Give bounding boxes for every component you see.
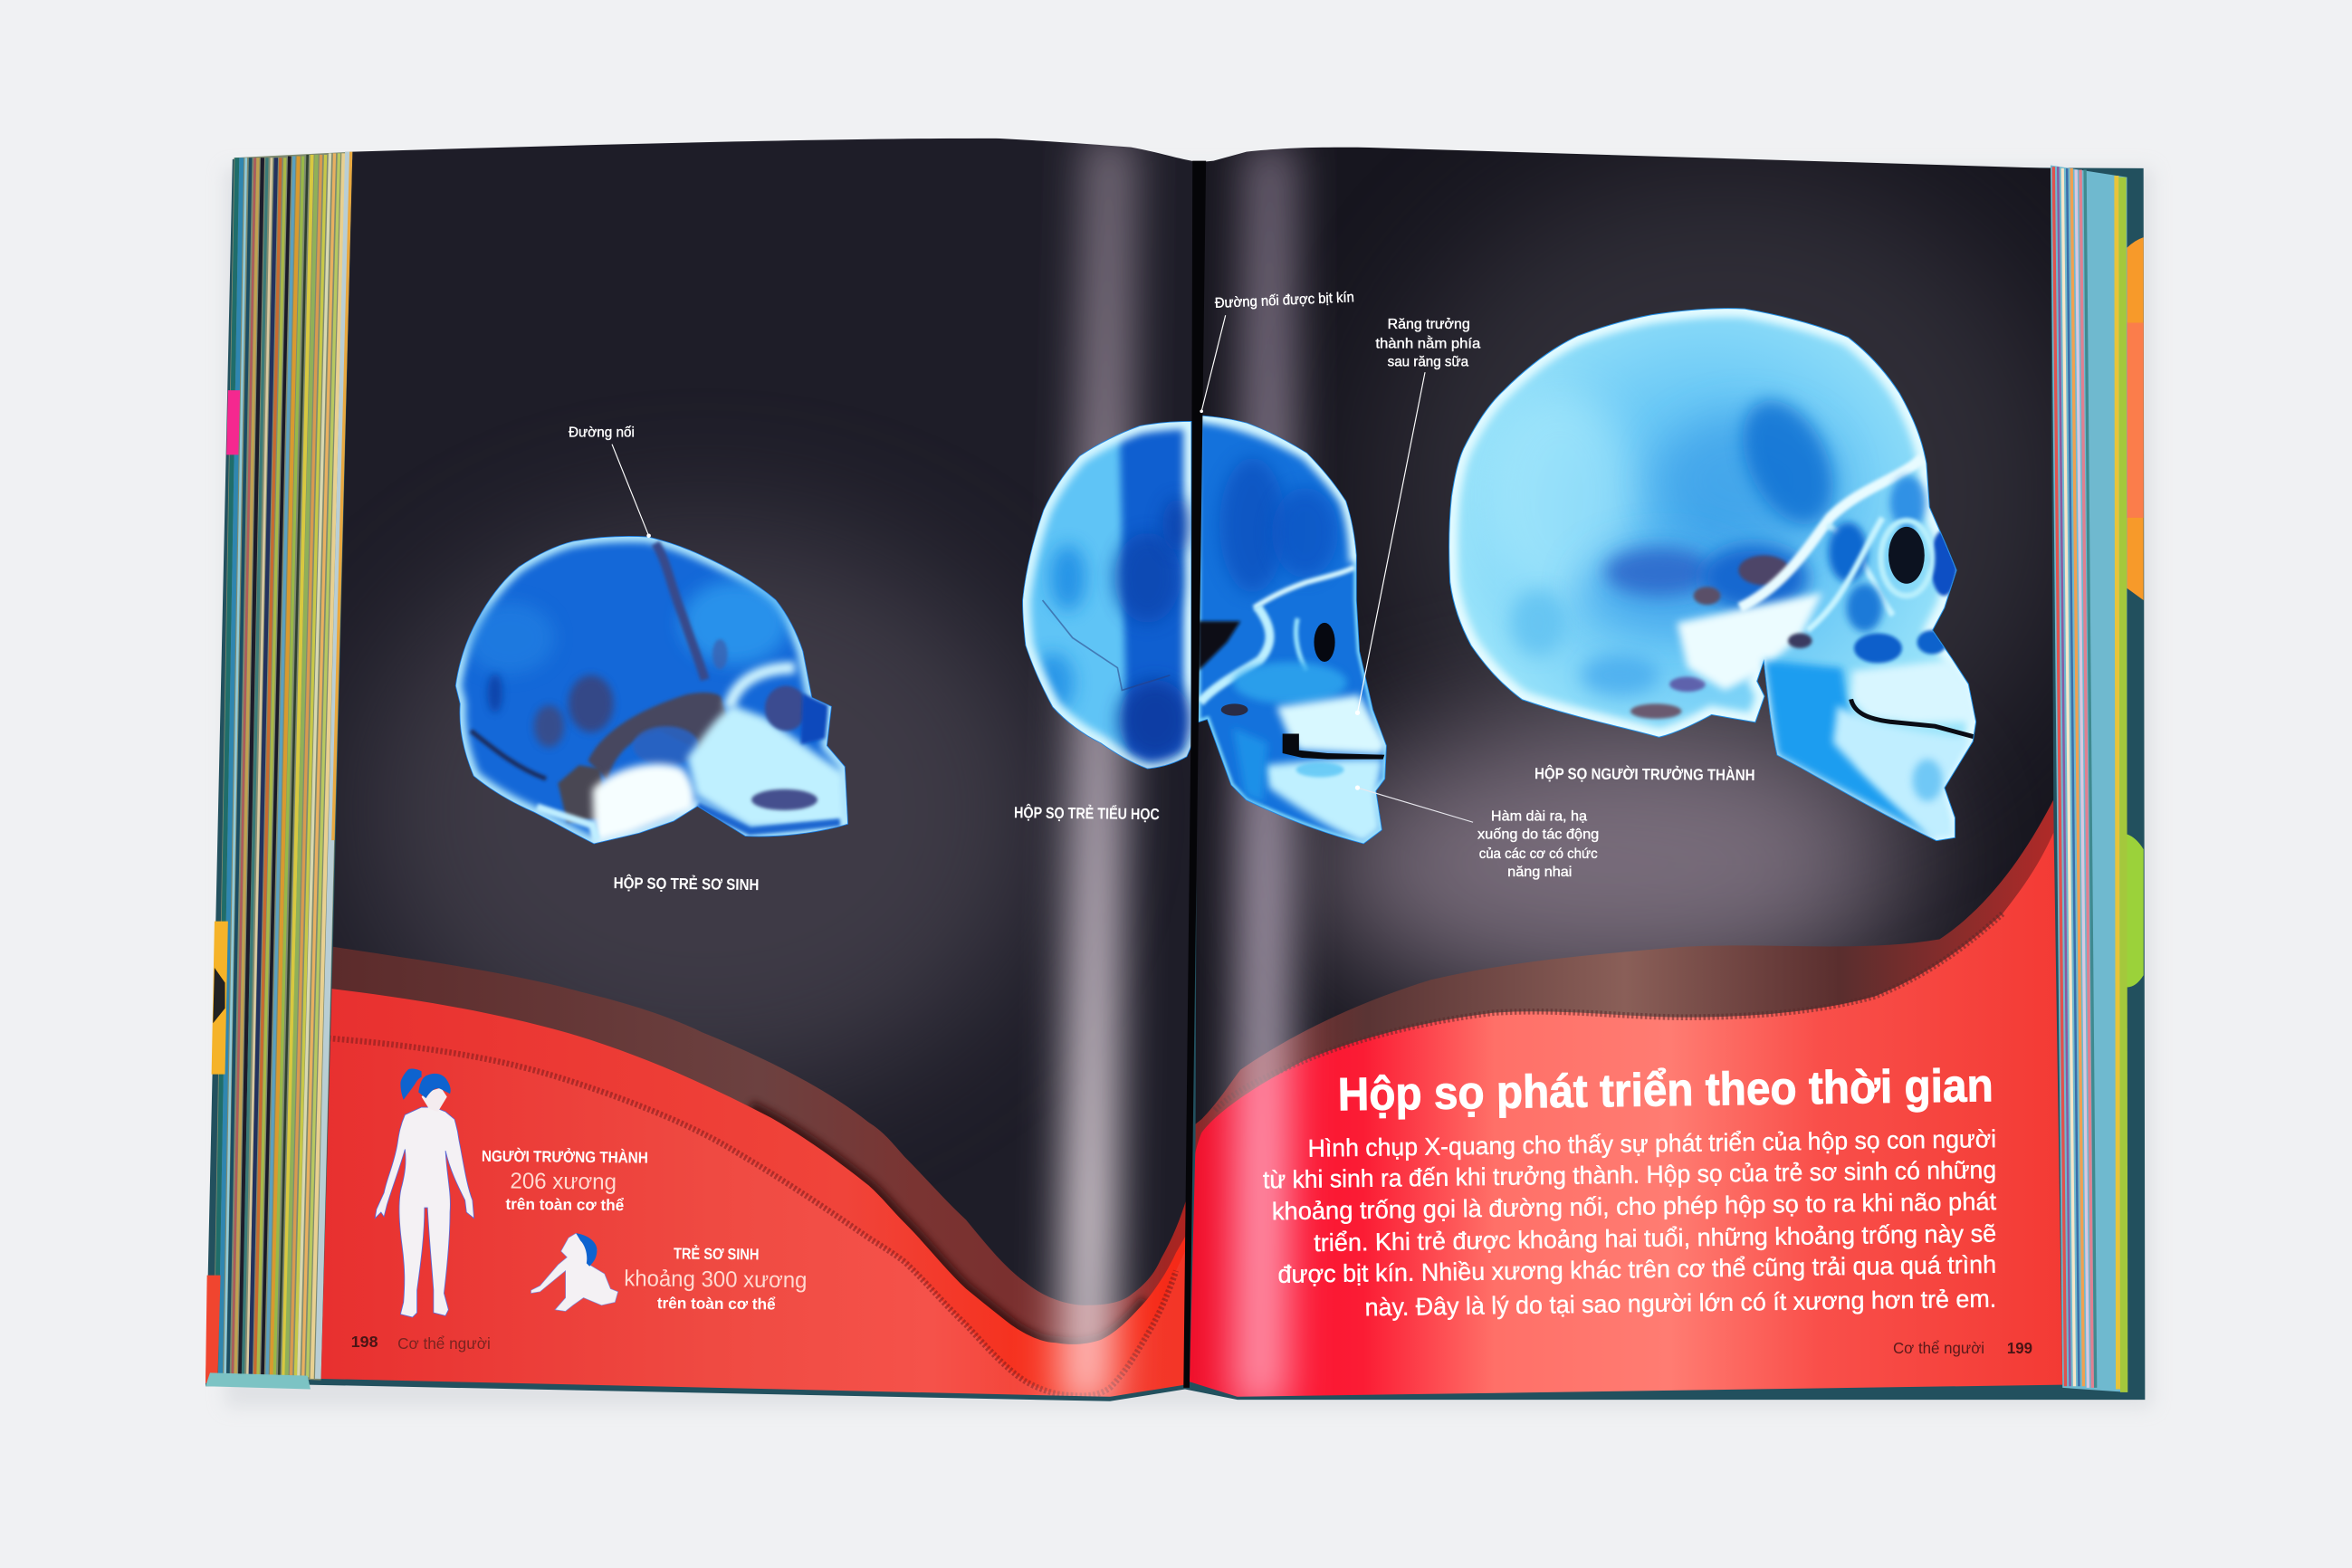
right page edge stack — [2051, 166, 2127, 1392]
body paragraph: từ khi sinh ra đến khi trưởng thành. Hộp sọ của trẻ sơ sinh có những — [1263, 1155, 1996, 1194]
right page sheen — [1233, 143, 1297, 1410]
title: Hộp sọ phát triển theo thời gian — [1337, 1059, 1993, 1120]
callout: adult teeth: Răng trưởng — [1388, 317, 1470, 332]
callout: sealed suture — [1200, 290, 1354, 413]
left page — [308, 132, 1208, 1410]
icon: crawling baby — [531, 1233, 618, 1311]
callout: suture — [569, 425, 651, 538]
newborn bone count — [624, 1244, 808, 1313]
left page number and section: Cơ thể người — [397, 1334, 491, 1353]
right page section and number: 199 — [2007, 1339, 2032, 1357]
body paragraph: khoảng trống gọi là đường nối, cho phép hộp sọ to ra khi não phát — [1272, 1187, 1997, 1225]
callout: sealed suture: Đường nối được bịt kín — [1215, 290, 1354, 311]
book cover — [206, 159, 2145, 1401]
body paragraph: này. Đây là lý do tại sao người lớn có ít xương hơn trẻ em. — [1364, 1285, 1996, 1321]
adult bone count: NGƯỜI TRƯỞNG THÀNH — [482, 1147, 648, 1167]
body paragraph: Hình chụp X-quang cho thấy sự phát triển của hộp sọ con người — [1307, 1124, 1996, 1162]
left page wave: main red — [608, 1095, 1185, 1396]
callout: suture: Đường nối — [569, 425, 635, 440]
left page wave: band shadow — [750, 1107, 1146, 1344]
left page edge stack — [213, 152, 352, 1381]
callout: adult teeth: sau răng sữa — [1388, 355, 1468, 370]
callout: jaw: năng nhai — [1507, 865, 1572, 880]
icon: adult woman — [375, 1069, 474, 1317]
caption: newborn skull: HỘP SỌ TRẺ SƠ SINH — [614, 874, 760, 894]
newborn bone count: khoảng 300 xương — [624, 1267, 808, 1293]
adult bone count: 206 xương — [510, 1170, 617, 1195]
body paragraph: triển. Khi trẻ được khoảng hai tuổi, những khoảng trống này sẽ — [1314, 1219, 1996, 1257]
body paragraph: được bịt kín. Nhiều xương khác trên cơ thể cũng trải qua quá trình — [1277, 1250, 1996, 1288]
cover tabs left — [206, 390, 311, 1390]
left page wave: dark band — [331, 947, 1186, 1343]
left page wave: orange layer — [308, 989, 1200, 1410]
callout: jaw — [1355, 785, 1599, 880]
adult skull x-ray — [1449, 309, 1975, 840]
caption: school-age skull: HỘP SỌ TRẺ TIỂU HỌC — [1014, 803, 1160, 823]
left page sheen — [1059, 135, 1137, 1410]
body paragraph — [1263, 1124, 1997, 1321]
callout: adult teeth — [1355, 317, 1481, 715]
newborn bone count: TRẺ SƠ SINH — [674, 1244, 760, 1263]
right page — [1185, 139, 2070, 1413]
spine gutter — [1183, 161, 1206, 1388]
school-age child skull x-ray — [1023, 406, 1388, 843]
callout: jaw: của các cơ có chức — [1479, 846, 1598, 862]
callout: adult teeth: thành nằm phía — [1375, 335, 1481, 352]
right page wave: speckled edge — [1215, 913, 2003, 1110]
left page number and section: 198 — [351, 1333, 378, 1351]
cover tabs right — [2127, 237, 2144, 988]
adult bone count: trên toàn cơ thể — [505, 1195, 625, 1214]
newborn bone count: trên toàn cơ thể — [657, 1294, 776, 1313]
adult bone count — [482, 1147, 648, 1214]
open book photograph — [206, 138, 2153, 1408]
right page section and number — [1893, 1339, 2032, 1357]
right page section and number: Cơ thể người — [1893, 1339, 1984, 1357]
left page number and section — [351, 1333, 491, 1353]
newborn skull x-ray — [456, 537, 847, 843]
left page wave: speckled edge — [329, 1038, 1176, 1396]
right page wave: main red — [1185, 833, 2070, 1410]
callout: jaw: xuống do tác động — [1477, 827, 1599, 842]
book shadow — [225, 168, 2153, 1407]
callout: jaw: Hàm dài ra, hạ — [1491, 809, 1587, 825]
caption: adult skull: HỘP SỌ NGƯỜI TRƯỞNG THÀNH — [1535, 764, 1755, 784]
right page wave: dark band — [1195, 800, 2055, 1153]
